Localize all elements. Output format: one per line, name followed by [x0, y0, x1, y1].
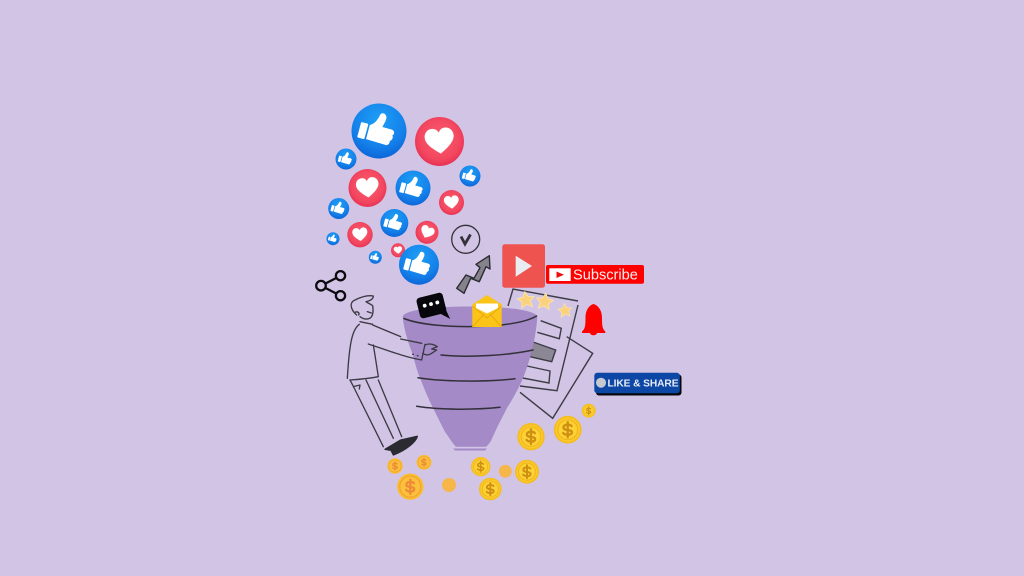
- orange coin: [387, 458, 403, 474]
- funnel: [403, 306, 537, 450]
- icon: video badge: [549, 268, 571, 281]
- coin: [515, 460, 539, 484]
- like bubble: [460, 166, 480, 186]
- arms: [368, 325, 437, 360]
- heart bubble: [348, 169, 386, 207]
- coin: [554, 416, 582, 444]
- reaction bubbles: [326, 104, 480, 285]
- like bubble: [328, 198, 349, 219]
- orange coin: [417, 455, 431, 470]
- heart bubble small: [391, 243, 405, 257]
- front sheet: [508, 289, 578, 391]
- orange coin: [397, 474, 424, 500]
- coin: [582, 404, 596, 418]
- like bubble: [336, 148, 356, 170]
- button label: LIKE & SHARE: [608, 379, 679, 390]
- subscribe button: [546, 265, 644, 284]
- shoe: [385, 436, 417, 455]
- like bubble large: [352, 104, 406, 158]
- coin: [517, 423, 545, 450]
- like bubble bottom: [399, 245, 439, 285]
- like bubble small: [326, 232, 340, 245]
- like bubble small: [369, 251, 382, 264]
- head: [351, 296, 373, 319]
- legs: [350, 380, 402, 447]
- icon: growth arrow: [457, 256, 490, 293]
- subscribe label: Subscribe: [573, 268, 638, 284]
- rating stars: [516, 290, 573, 317]
- star 2: [535, 292, 554, 310]
- coin: [479, 478, 502, 500]
- icon: notification bell: [582, 304, 605, 335]
- funnel body: [403, 306, 537, 447]
- like and share button: [594, 373, 682, 396]
- form field top: [537, 321, 561, 339]
- plain coin: [499, 465, 512, 478]
- back sheet: [520, 337, 593, 418]
- icon: check circle: [452, 225, 480, 253]
- person: [347, 296, 437, 455]
- star 1: [516, 290, 535, 309]
- star 3: [557, 303, 573, 317]
- funnel bands: [404, 316, 536, 409]
- funnel base: [453, 448, 487, 450]
- icon: chat bubble: [416, 292, 450, 326]
- icon: share dot: [596, 378, 606, 388]
- heart bubble tilted: [411, 217, 443, 248]
- plain coin: [442, 478, 456, 492]
- coin: [471, 457, 490, 476]
- icon: play tile: [502, 244, 545, 288]
- torso: [347, 322, 378, 380]
- document sheets: [508, 289, 593, 418]
- heart bubble: [347, 222, 373, 247]
- coins: [387, 404, 596, 500]
- form field highlighted: [530, 342, 556, 362]
- like bubble: [396, 170, 430, 206]
- icon: share: [316, 271, 345, 300]
- form field bottom: [523, 366, 550, 383]
- heart bubble: [439, 190, 464, 215]
- like bubble: [380, 209, 408, 237]
- heart bubble large: [415, 117, 464, 166]
- icon: mail envelope: [472, 295, 502, 327]
